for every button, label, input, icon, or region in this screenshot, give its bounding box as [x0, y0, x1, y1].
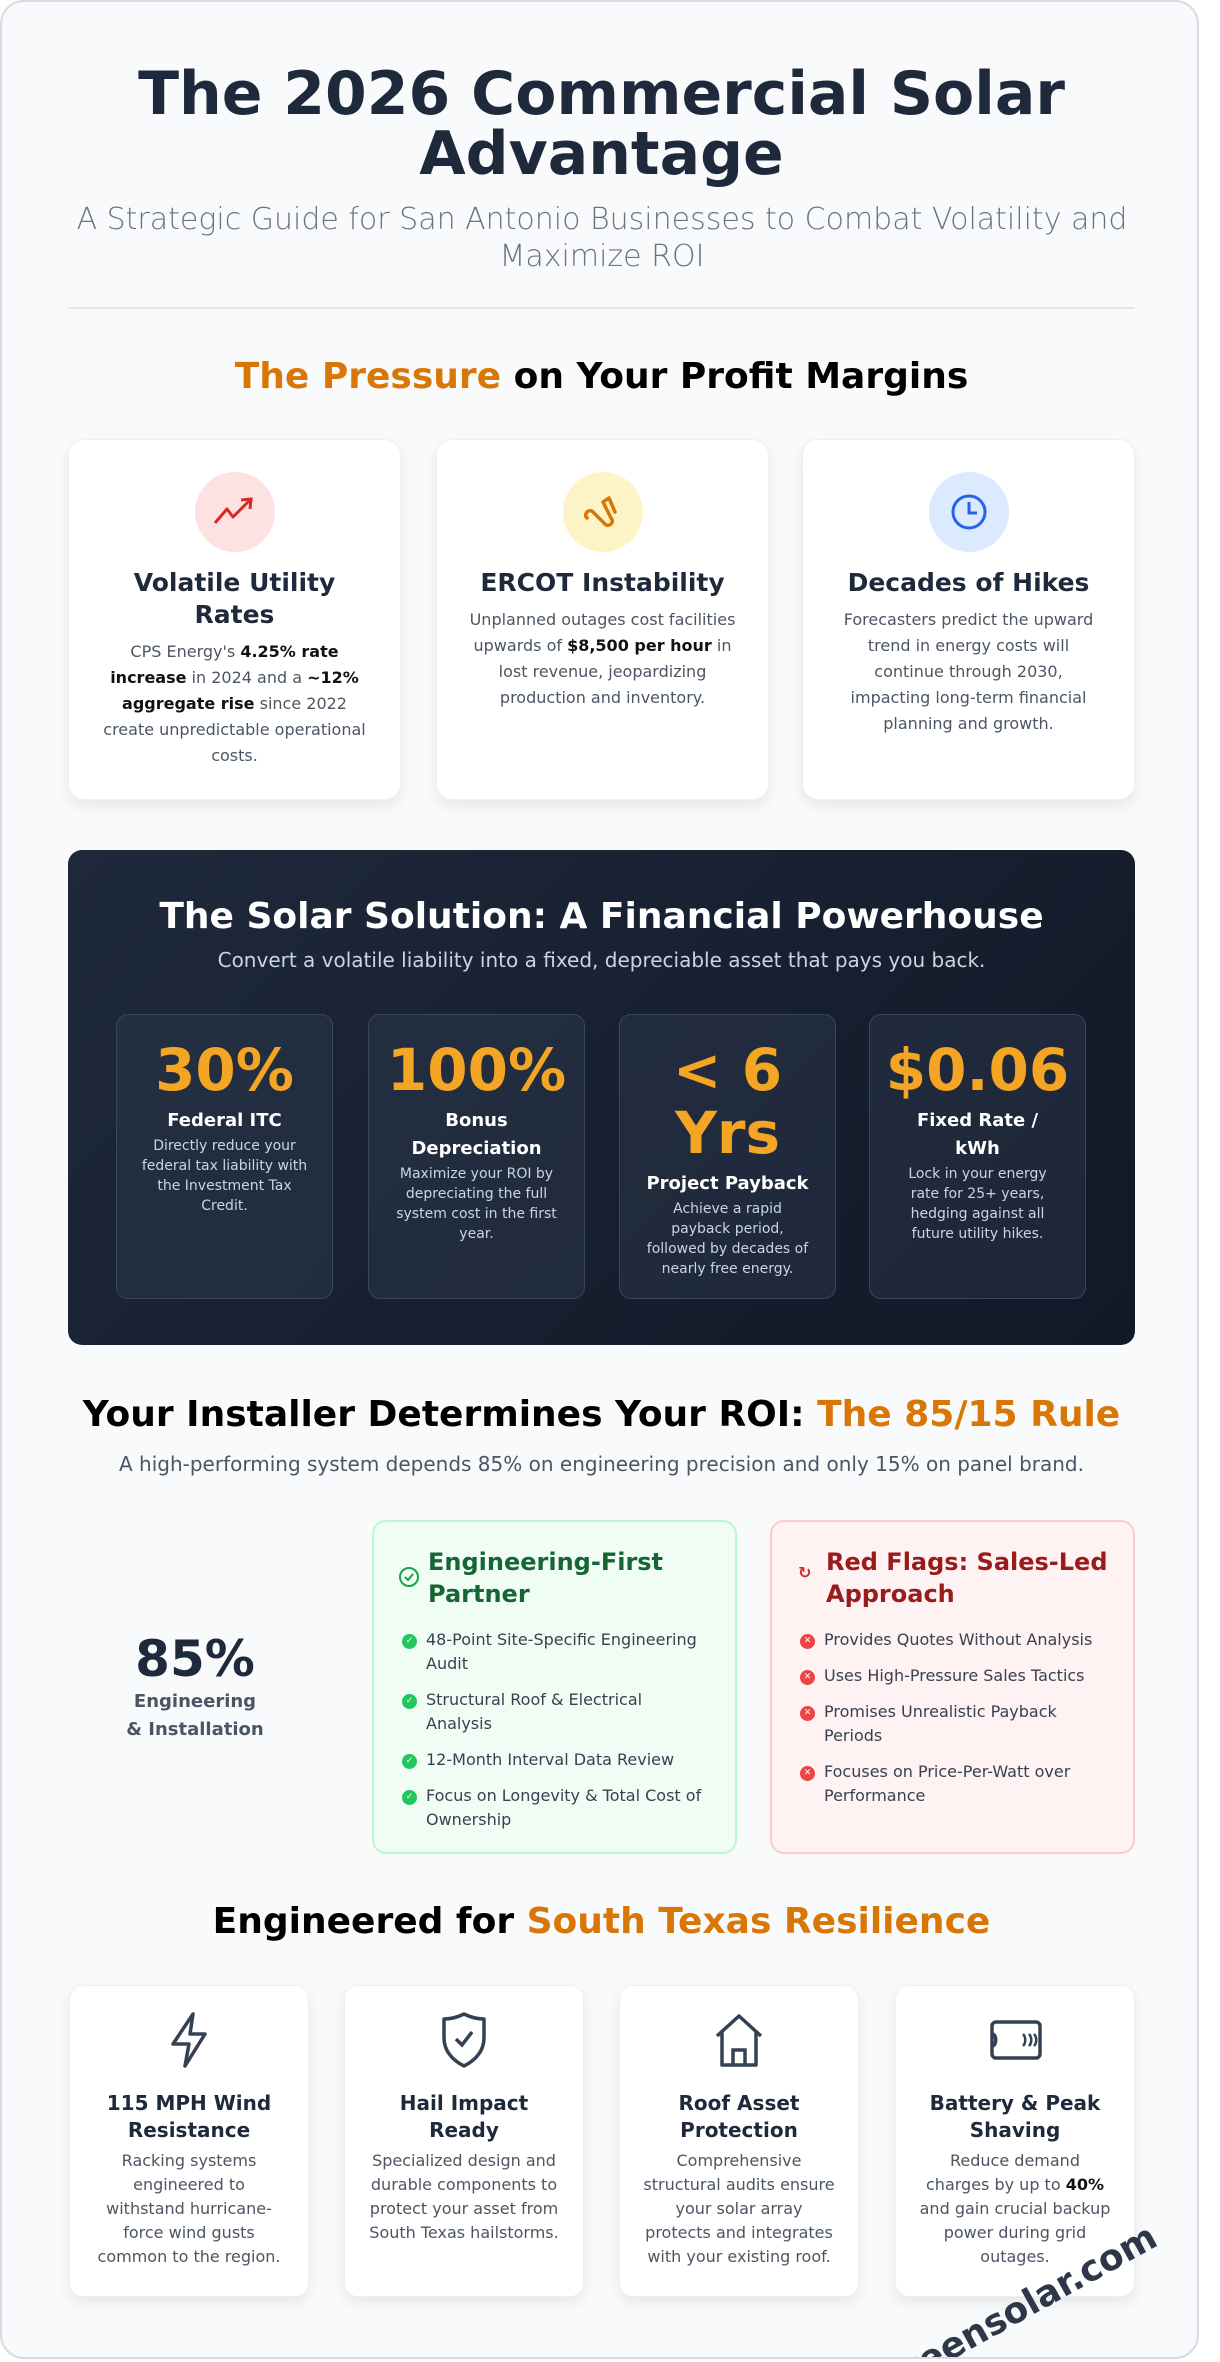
card: decades of hikes: Forecasters predict the upward trend in energy costs will continue through 2030, impacting long-term financial planning and growth. [844, 610, 1093, 733]
card: hail [344, 1985, 584, 2297]
panel: red flags: Focuses on Price-Per-Watt over Performance [824, 1762, 1070, 1805]
heading: engineering-first: Engineering-First Partner [428, 1548, 663, 1608]
stat: bonus depreciation: 100% [387, 1036, 566, 1104]
icon: lightning [171, 2012, 207, 2068]
icon: clock [928, 472, 1008, 552]
heading: resilience: Engineered for South Texas Resilience [213, 1901, 990, 1942]
card: volatile utility rates: CPS Energy's 4.25% rate increase in 2024 and a ~12% aggregate rise since 2022 create unpredictable operational costs. [103, 642, 366, 765]
panel: engineering-first partner: ✓ [406, 1696, 413, 1706]
card: ERCOT instability: Unplanned outages cost facilities upwards of $8,500 per hour in lost revenue, jeopardizing production and inventory. [470, 610, 735, 707]
card: decades of hikes [802, 439, 1135, 800]
panel: engineering-first partner: ✓ [406, 1636, 413, 1646]
title: The 2026 Commercial Solar [138, 59, 1065, 129]
panel: engineering-first partner: Focus on Longevity & Total Cost of Ownership [426, 1786, 701, 1829]
card: hail: Specialized design and durable components to protect your asset from South Texas hailstorms. [369, 2151, 559, 2242]
panel: engineering-first partner: 12-Month Interval Data Review [426, 1750, 674, 1769]
icon: plug [562, 472, 642, 552]
panel: engineering-first partner: ✓ [406, 1756, 413, 1766]
panel: red flags: Uses High-Pressure Sales Tactics [824, 1666, 1085, 1685]
panel: red flags: ✕ [804, 1768, 811, 1778]
stat: 85% engineering: Engineering [134, 1691, 256, 1712]
panel: red flags: ✕ [804, 1636, 811, 1646]
stat: federal ITC: 30% [155, 1036, 294, 1104]
stat: 85% engineering: 85% [135, 1630, 255, 1688]
card: hail: Hail Impact Ready [400, 2091, 528, 2142]
stat: 85% engineering: & Installation [126, 1719, 264, 1740]
stat: fixed rate [869, 1014, 1086, 1299]
stat: fixed rate: Lock in your energy rate for 25+ years, hedging against all future utility hikes. [908, 1166, 1047, 1242]
card: ERCOT instability [436, 439, 769, 800]
title [138, 59, 1065, 189]
stat: payback [619, 1014, 836, 1299]
card: roof: Roof Asset Protection [679, 2091, 799, 2142]
card: wind: Racking systems engineered to withstand hurricane-force wind gusts common to the region. [98, 2151, 280, 2266]
card: volatile utility rates [68, 439, 401, 800]
panel: engineering-first partner [372, 1520, 737, 1854]
icon: trend up [194, 472, 274, 552]
icon: shield [442, 2012, 486, 2068]
card: battery [895, 1985, 1135, 2297]
icon: house [716, 2014, 762, 2067]
card: wind [69, 1985, 309, 2297]
card: decades of hikes: Decades of Hikes [848, 568, 1089, 597]
panel: red flags [770, 1520, 1135, 1854]
panel: solar solution [68, 850, 1135, 1345]
panel: engineering-first partner: Structural Roof & Electrical Analysis [426, 1690, 642, 1733]
card: ERCOT instability: ERCOT Instability [480, 568, 725, 597]
card: roof: Comprehensive structural audits ensure your solar array protects and integrates with your existing roof. [643, 2151, 835, 2266]
stat: federal ITC: Federal ITC [167, 1110, 282, 1131]
stat: payback: Achieve a rapid payback period, followed by decades of nearly free energy. [647, 1201, 808, 1277]
stat: bonus depreciation: Maximize your ROI by depreciating the full system cost in the first year. [396, 1166, 557, 1242]
heading: red flags: Red Flags: Sales-Led Approach [826, 1548, 1108, 1608]
panel: red flags: Promises Unrealistic Payback Periods [824, 1702, 1057, 1745]
heading: 85/15 rule: Your Installer Determines Your ROI: The 85/15 Rule [83, 1394, 1120, 1435]
card: roof [619, 1985, 859, 2297]
heading: solar solution: The Solar Solution: A Financial Powerhouse [159, 896, 1044, 937]
stat: federal ITC [116, 1014, 333, 1299]
title: Advantage [419, 119, 784, 189]
panel: engineering-first partner: ✓ [406, 1792, 413, 1802]
subheading: 85/15: A high-performing system depends 85% on engineering precision and only 15% on panel brand. [119, 1452, 1084, 1476]
card: battery: Reduce demand charges by up to 40% and gain crucial backup power during grid outages. [920, 2151, 1110, 2266]
panel: red flags: ✕ [804, 1708, 811, 1718]
stat: payback: Project Payback [646, 1173, 809, 1194]
icon: battery [990, 2020, 1042, 2060]
stat: federal ITC: Directly reduce your federal tax liability with the Investment Tax Credit. [142, 1138, 307, 1214]
stat: 85% engineering [126, 1630, 264, 1740]
panel: red flags: Provides Quotes Without Analysis [824, 1630, 1092, 1649]
stat: fixed rate: Fixed Rate / kWh [917, 1110, 1038, 1159]
card: wind: 115 MPH Wind Resistance [107, 2091, 271, 2142]
stat: bonus depreciation [368, 1014, 585, 1299]
subheading: Convert a volatile liability into a fixed, depreciable asset that pays you back. [218, 948, 985, 972]
panel: red flags: ✕ [804, 1672, 811, 1682]
stat: payback: < 6 Yrs [673, 1036, 782, 1167]
subtitle: A Strategic Guide for San Antonio Businesses to Combat Volatility and Maximize ROI [77, 202, 1127, 274]
heading: pressure: The Pressure on Your Profit Margins [235, 356, 968, 397]
stat: bonus depreciation: Bonus Depreciation [411, 1110, 542, 1159]
stat: fixed rate: $0.06 [886, 1036, 1069, 1104]
panel: engineering-first partner: 48-Point Site-Specific Engineering Audit [426, 1630, 697, 1673]
card: volatile utility rates: Volatile Utility Rates [134, 568, 335, 629]
heading: red flags: ↻ [798, 1563, 811, 1582]
card: battery: Battery & Peak Shaving [930, 2091, 1100, 2142]
